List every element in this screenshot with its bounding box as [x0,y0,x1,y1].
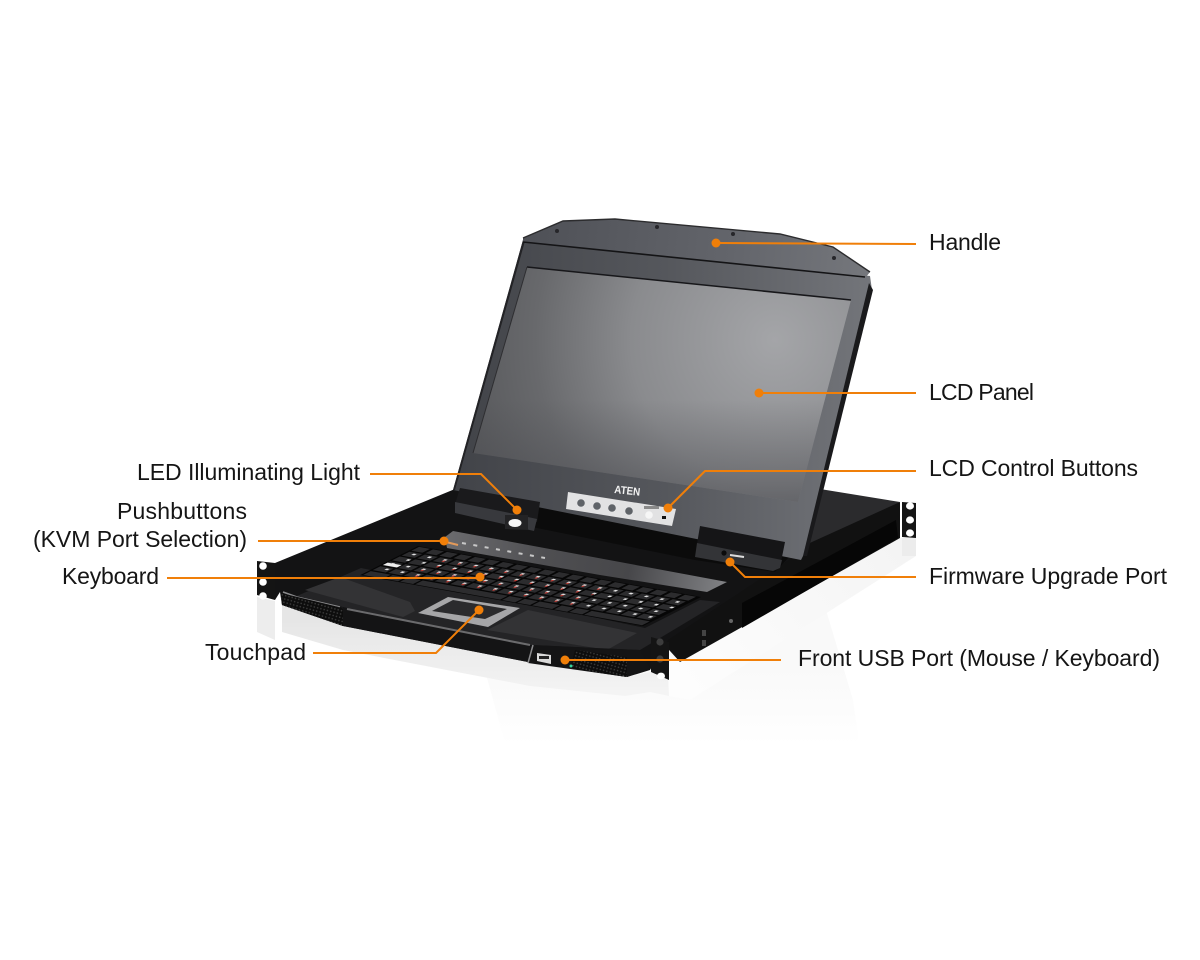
callout: Touchpad [205,606,484,665]
left hinge with LED light [455,488,540,531]
rack ear: right [902,502,916,538]
callout: Pushbuttons [33,498,448,552]
bezel right edge [803,283,873,556]
keyboard [360,546,701,626]
callout: Pushbuttons: (KVM Port Selection) [33,526,247,552]
top reflective strip and pushbuttons [445,531,727,592]
callout: Keyboard: Keyboard [62,563,159,589]
palm rest [297,568,720,650]
LCD assembly [453,219,873,571]
device: KVM console [257,219,916,680]
ATEN logo: ATEN [614,484,641,499]
right hinge with firmware port [695,526,785,571]
handle [523,219,870,277]
callout: LCD Control Buttons [664,455,1138,512]
keyboard tray body [275,489,795,677]
callout: LCD Panel: LCD Panel [929,379,1034,405]
callout: Pushbuttons: Pushbuttons [117,498,247,524]
shadow below LCD [455,490,790,572]
product reflection [257,538,916,750]
callout: LCD Panel [754,379,1034,405]
callout: Touchpad: Touchpad [205,639,306,665]
LCD control buttons [566,492,676,526]
callout: LED Illuminating Light: LED Illuminating Light [137,459,361,485]
callout: Firmware Upgrade Port: Firmware Upgrade Port [929,563,1168,589]
front lip [281,592,533,663]
callout: Handle: Handle [929,229,1001,255]
rack ear: left [257,561,275,600]
callout: Front USB Port [560,645,1160,671]
touchpad [418,597,520,627]
callout: Firmware Upgrade Port [726,558,1168,589]
right side rail [660,502,900,662]
callout: LCD Control Buttons: LCD Control Buttons [929,455,1138,481]
LCD screen [473,267,851,502]
callout: Handle [712,229,1001,255]
callout: Front USB Port: Front USB Port (Mouse / Keyboard) [798,645,1160,671]
USB port [537,653,551,664]
front USB section [528,645,650,677]
rear tray [760,489,900,566]
LCD bezel [453,240,872,560]
callout: LED Illuminating Light [137,459,522,514]
bezel left edge [453,240,525,490]
rack ear: front right [651,637,669,680]
callout: Keyboard [62,563,484,589]
